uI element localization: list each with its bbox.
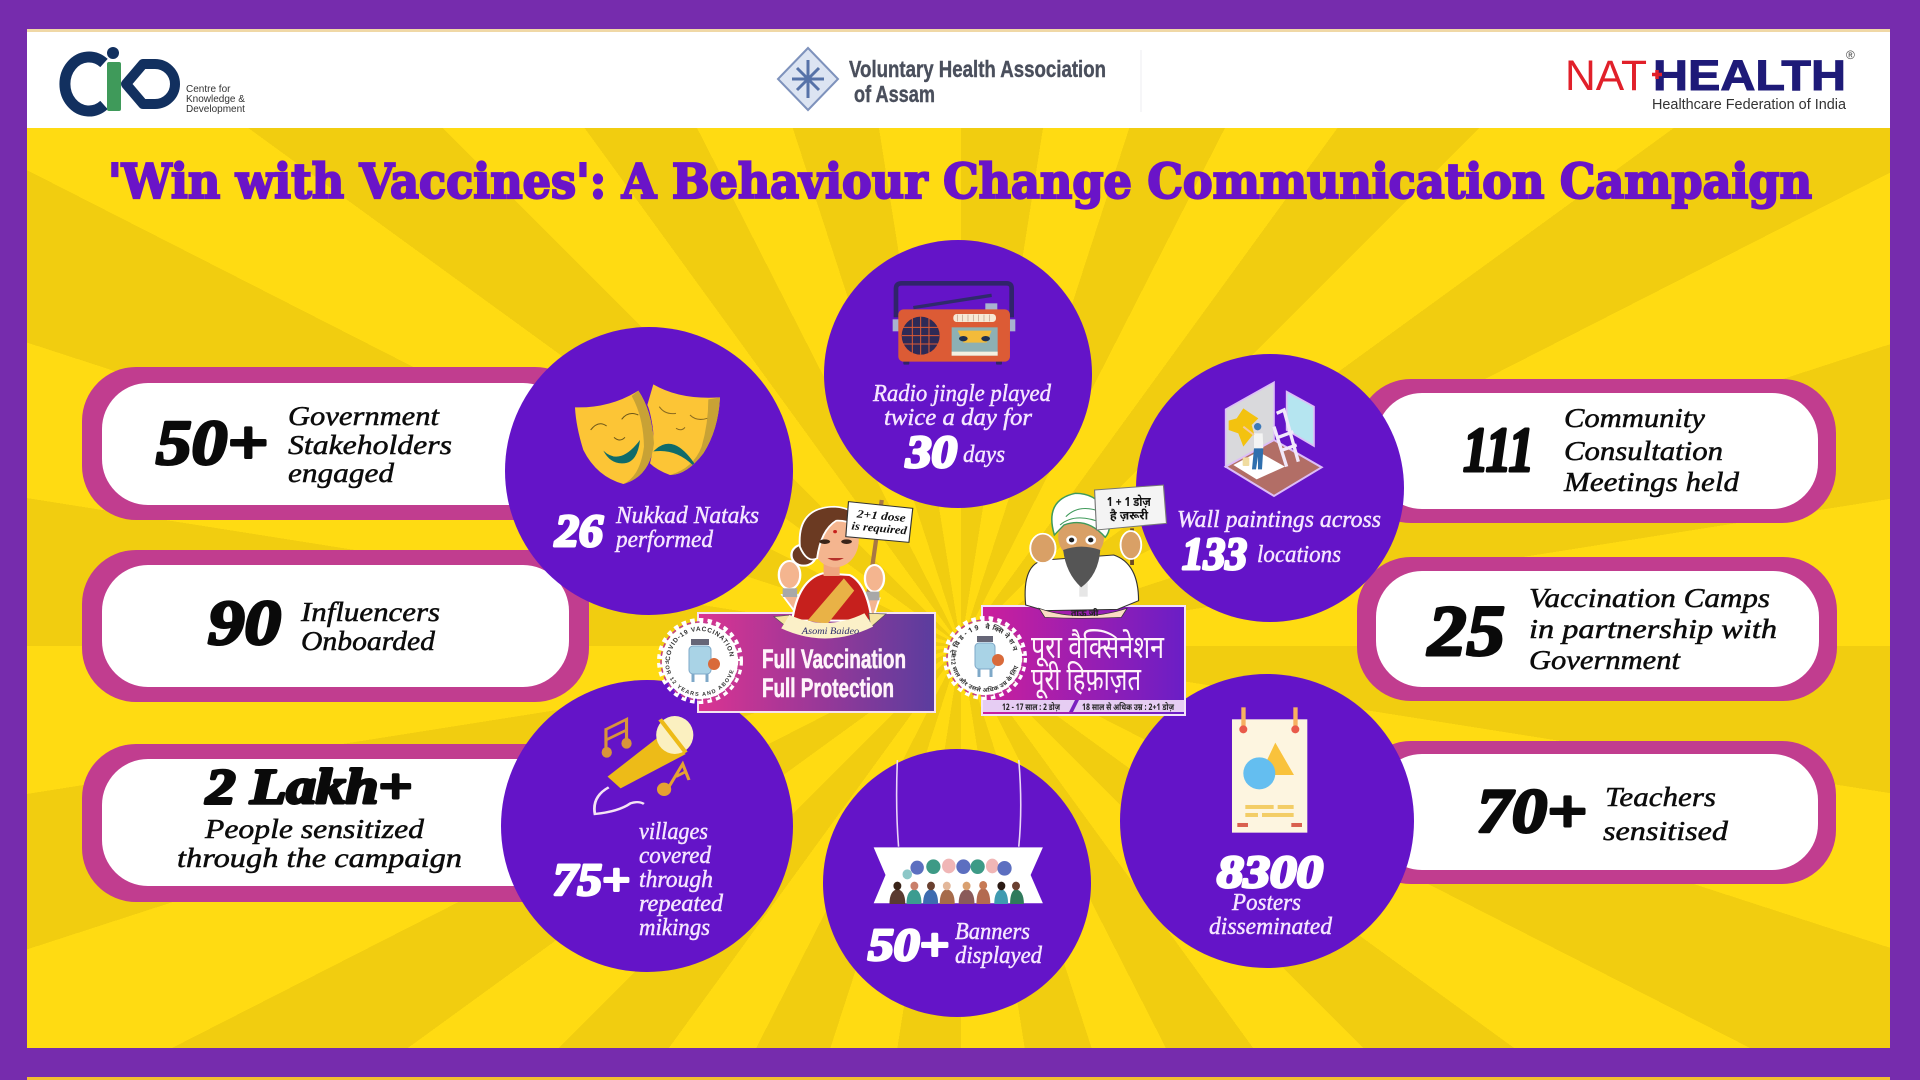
circle: nukkad nataks: Nukkad Nataks (615, 503, 759, 529)
logo: Centre for Knowledge and Development (65, 47, 245, 115)
panel: Assamese banner with character (657, 500, 936, 713)
circle: banners (823, 749, 1091, 1017)
pill: 90 influencers: Onboarded (301, 626, 436, 656)
panel: Hindi banner with character: पूरा वैक्सिनेशन (1031, 629, 1165, 672)
badge: covid-19 vaccination: COVID-19 VACCINATION (666, 626, 734, 661)
character: Tau Ji: ताऊ जी (1071, 608, 1099, 620)
circle: mikings: mikings (639, 915, 710, 941)
character: Asomi Baideo (774, 500, 913, 637)
circle: banners: displayed (955, 943, 1043, 969)
character: Asomi Baideo: Asomi Baideo (801, 627, 859, 637)
circle: wall paintings (1136, 354, 1404, 622)
circle: wall paintings: Wall paintings across (1177, 507, 1381, 533)
panel: Hindi banner with character: 12 - 17 साल : 2 डोज़ (1002, 701, 1061, 714)
circle: mikings (501, 680, 793, 972)
icon: poster (1232, 707, 1307, 833)
pill: 25 vaccination camps: in partnership with (1529, 614, 1777, 644)
pill: 25 vaccination camps (1357, 557, 1837, 701)
pill: 50+ government stakeholders: 50+ (156, 407, 268, 478)
pill: 70+ teachers (1357, 741, 1836, 884)
circle: radio jingle: twice a day for (884, 405, 1033, 431)
pill: 2 Lakh+ people: through the campaign (177, 843, 462, 873)
logo: Centre for Knowledge and Development: Centre for (186, 84, 231, 95)
icon: hanging banner (874, 760, 1043, 904)
circle: wall paintings: locations (1257, 542, 1341, 568)
circle: nukkad nataks: 26 (554, 505, 603, 556)
circle: nukkad nataks: performed (614, 527, 714, 553)
pill: 111 community meetings: Consultation (1564, 436, 1723, 466)
pill: 2 Lakh+ people: People sensitized (204, 814, 425, 844)
panel: Assamese banner with character: Full Protection (762, 673, 894, 703)
character: Tau Ji: 1 + 1 डोज़ (1107, 494, 1151, 512)
pill: 25 vaccination camps: 25 (1427, 591, 1505, 671)
pill: 111 community meetings: Community (1564, 403, 1705, 433)
pill: 90 influencers: Influencers (300, 597, 440, 627)
header bar with logos (27, 29, 1890, 128)
circle: posters: 8300 (1217, 846, 1323, 897)
circle: radio jingle (824, 240, 1092, 508)
pill: 2 Lakh+ people: 2 Lakh+ (205, 758, 412, 814)
badge: covid-19 vaccination: FOR 12 YEARS AND ABOVE (665, 661, 734, 696)
circle: radio jingle: 30 (905, 426, 957, 477)
badge: covid-19 vaccination hindi: 12 साल और उससे अधिक उम्र के लिए (951, 658, 1018, 692)
title: 'Win with Vaccines': A Behaviour Change Communication Campaign (108, 154, 1812, 210)
pill: 50+ government stakeholders: Stakeholders (288, 430, 452, 460)
circle: radio jingle: days (963, 442, 1005, 468)
panel: Hindi banner with character: 18 साल से अधिक उम्र : 2+1 डोज़ (1082, 700, 1175, 714)
circle: mikings: repeated (639, 891, 724, 917)
icon: wall painter (1226, 382, 1322, 496)
badge: covid-19 vaccination hindi (943, 616, 1027, 700)
circle: mikings: covered (639, 843, 712, 869)
pill: 50+ government stakeholders: engaged (288, 458, 395, 488)
pill: 111 community meetings (1357, 379, 1836, 523)
character: Asomi Baideo: is required (851, 519, 908, 537)
character: Tau Ji: है ज़रूरी (1110, 508, 1148, 525)
character: Asomi Baideo: 2+1 dose (855, 507, 907, 525)
pill: 25 vaccination camps: Government (1529, 645, 1682, 675)
circle: banners: Banners (955, 919, 1030, 945)
logo: NATHEALTH: ® (1846, 48, 1855, 62)
pill: 111 community meetings: Meetings held (1563, 467, 1740, 497)
pill: 70+ teachers: Teachers (1605, 782, 1716, 812)
circle: posters: Posters (1231, 890, 1301, 916)
circle: radio jingle: Radio jingle played (872, 381, 1052, 407)
pill: 50+ government stakeholders (82, 367, 589, 520)
pill: 111 community meetings: 111 (1463, 414, 1534, 485)
panel: Hindi banner with character: पूरी हिफ़ाज़त (1031, 661, 1142, 704)
logo: Centre for Knowledge and Development: Knowledge & (186, 94, 245, 105)
pill: 25 vaccination camps: Vaccination Camps (1529, 583, 1770, 613)
circle: posters: disseminated (1209, 914, 1333, 940)
circle: mikings: 75+ (553, 854, 630, 905)
logo: NATHEALTH: NAT (1565, 52, 1647, 100)
logo: Voluntary Health Association of Assam (778, 48, 1141, 112)
icon: theatre masks (575, 384, 720, 484)
pill: 90 influencers (82, 550, 589, 702)
pill: 50+ government stakeholders: Government (288, 401, 441, 431)
circle: wall paintings: 133 (1182, 528, 1247, 579)
logo: NATHEALTH: HEALTH (1653, 52, 1846, 100)
pill: 70+ teachers: 70+ (1477, 778, 1587, 846)
circle: nukkad nataks (505, 327, 793, 615)
logo: NATHEALTH (1565, 48, 1855, 113)
circle: mikings: villages (639, 819, 708, 845)
pill: 90 influencers: 90 (208, 587, 281, 658)
logo: Voluntary Health Association of Assam: of Assam (854, 81, 935, 107)
icon: microphone (594, 716, 693, 814)
pill: 2 Lakh+ people (82, 744, 589, 902)
circle: posters (1120, 674, 1414, 968)
icon: radio (893, 283, 1015, 365)
character: Tau Ji (1025, 485, 1166, 620)
logo: NATHEALTH: Healthcare Federation of India (1652, 97, 1847, 113)
panel: Assamese banner with character: Full Vaccination (762, 644, 906, 674)
panel: Hindi banner with character (943, 484, 1186, 716)
logo: Voluntary Health Association of Assam: Voluntary Health Association (849, 56, 1106, 82)
badge: covid-19 vaccination hindi: कोविड-19 वैक्सिनेशन (950, 622, 1018, 658)
badge: covid-19 vaccination (657, 618, 743, 704)
logo: Centre for Knowledge and Development: Development (186, 104, 245, 115)
circle: banners: 50+ (868, 919, 949, 970)
circle: mikings: through (639, 867, 713, 893)
pill: 70+ teachers: sensitised (1603, 816, 1729, 846)
